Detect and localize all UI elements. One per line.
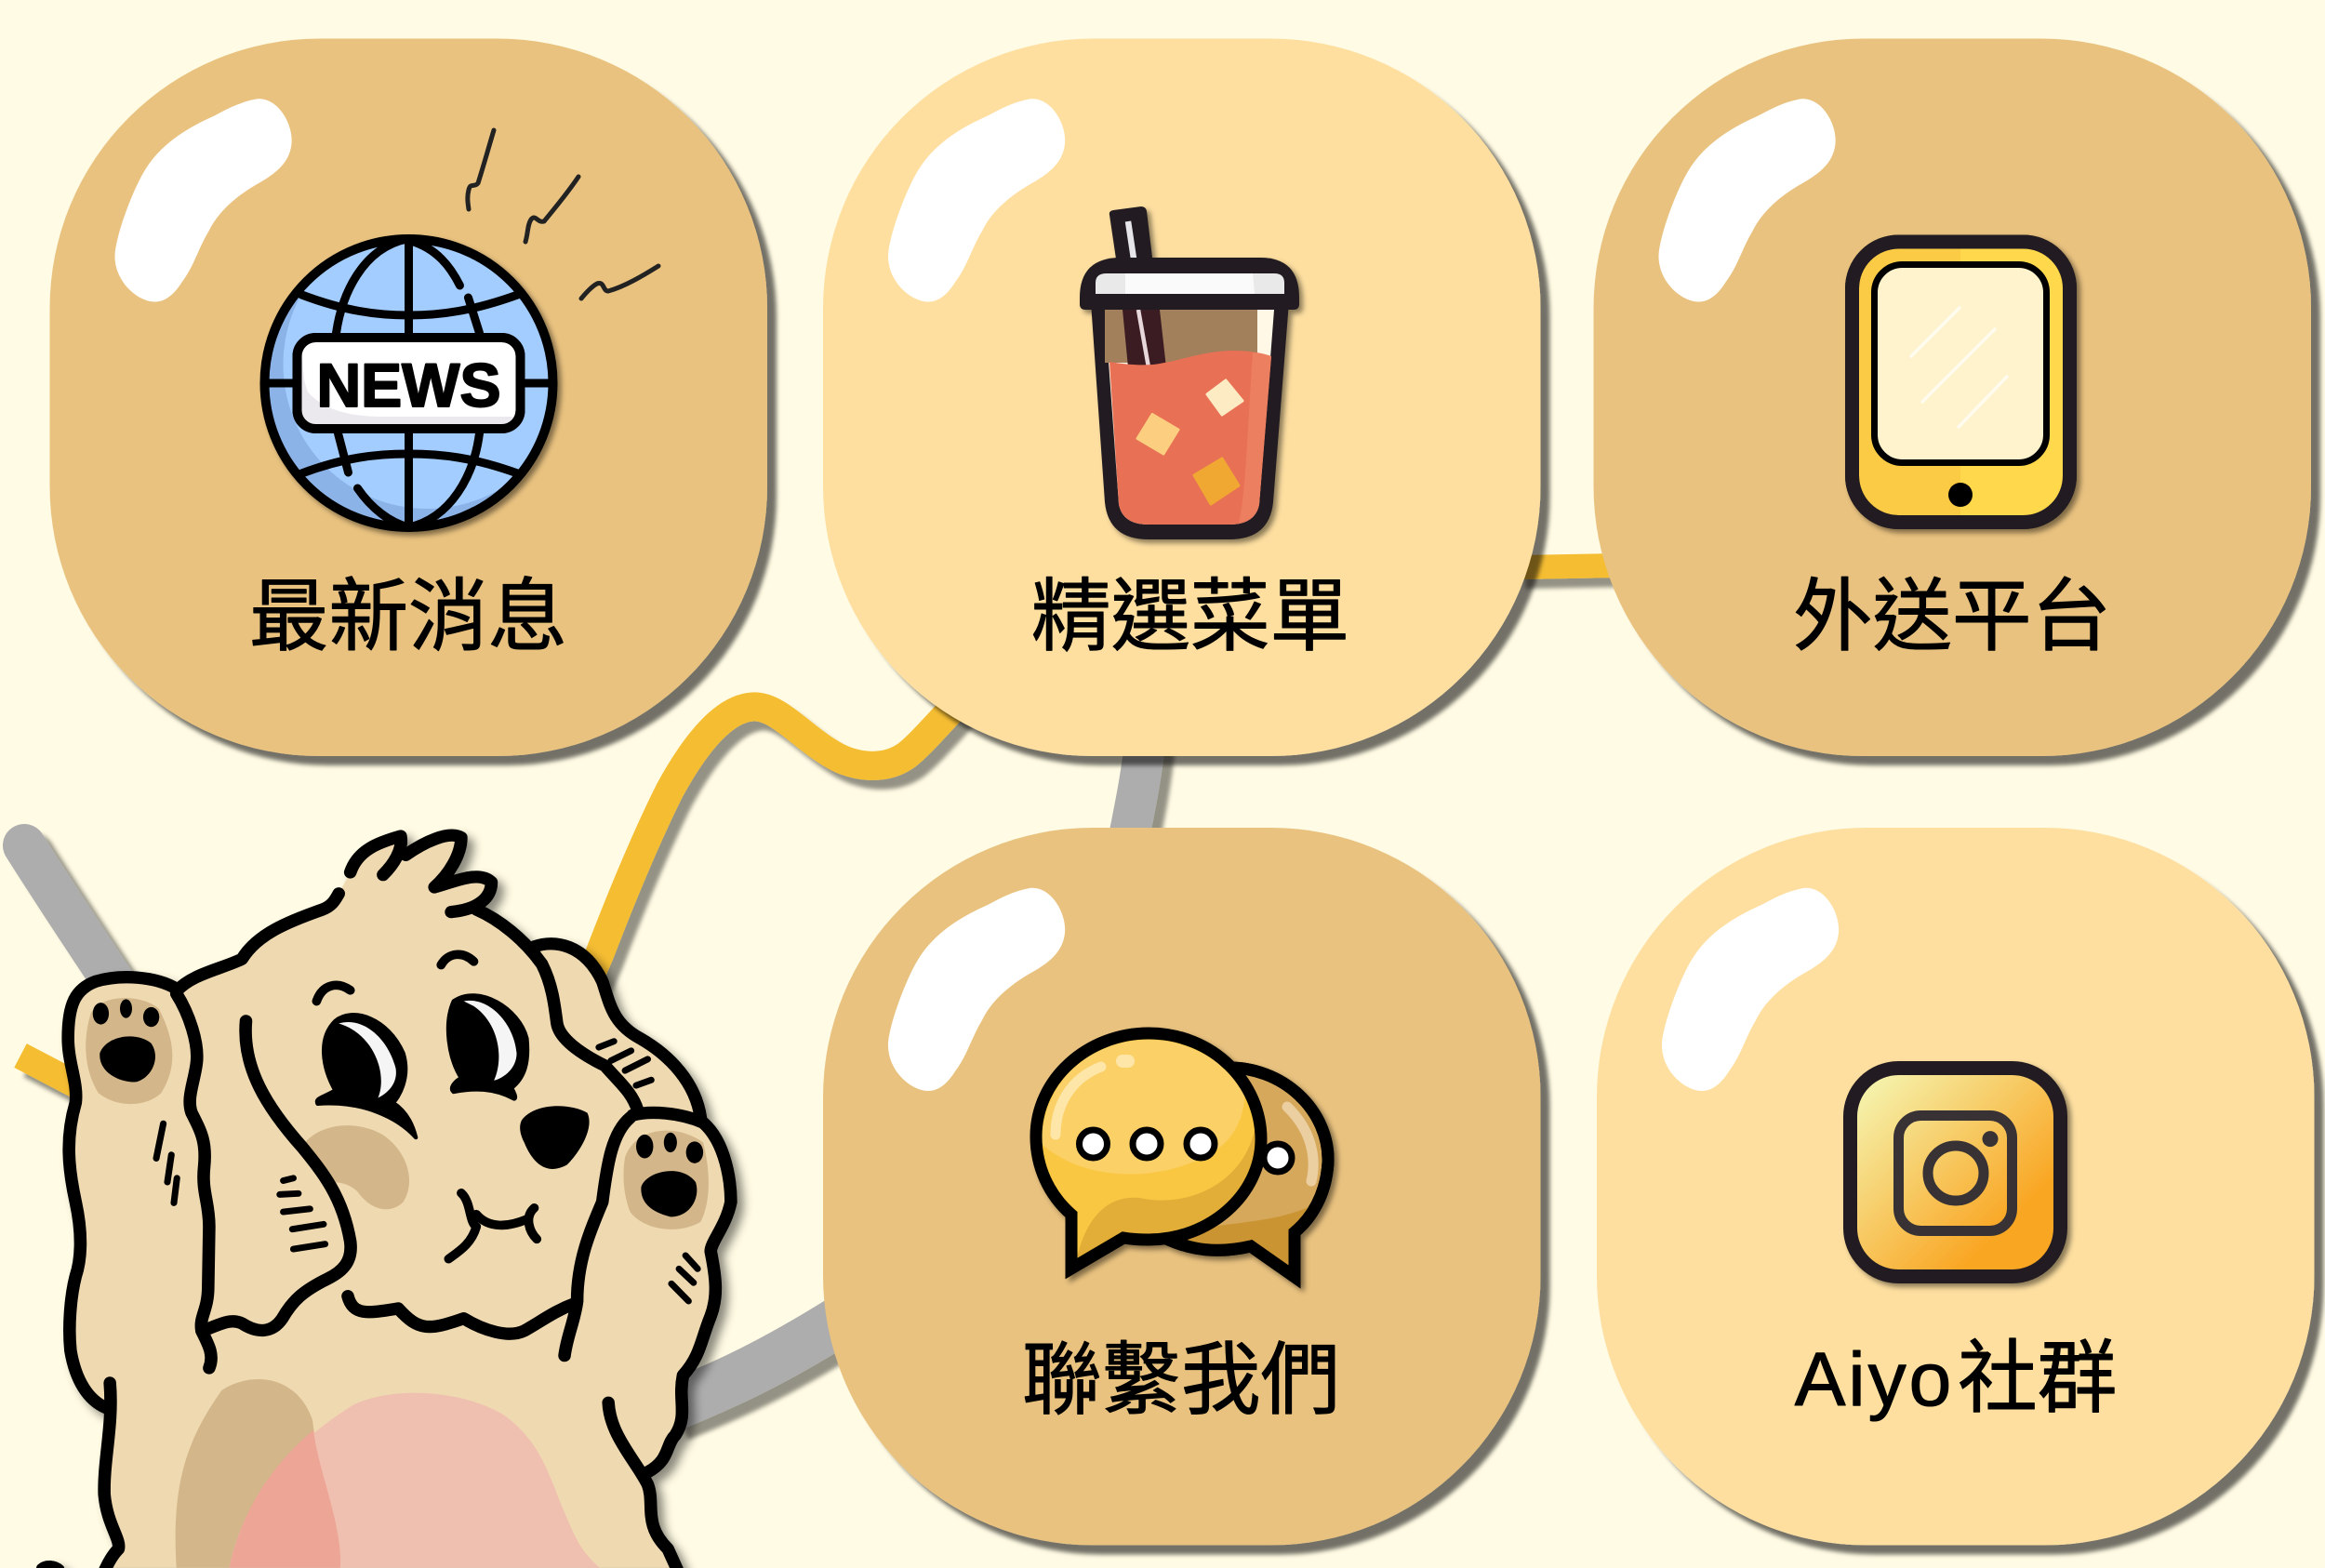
gloss highlight	[115, 99, 292, 302]
cup body	[1091, 302, 1289, 539]
home button	[1948, 483, 1973, 507]
card background	[823, 828, 1540, 1546]
panel: Aiyo社群	[1597, 828, 2314, 1546]
drink liquid	[1109, 351, 1271, 525]
gloss highlight	[888, 99, 1065, 302]
straw top	[1109, 206, 1153, 265]
back bubble	[1162, 1068, 1328, 1277]
panel: 聯繫我們	[823, 828, 1540, 1546]
belly patches	[176, 1379, 600, 1568]
gloss highlight	[1662, 888, 1839, 1091]
label: 外送平台	[1793, 573, 2111, 661]
card background	[823, 39, 1540, 756]
illustration: puppy	[40, 835, 731, 1568]
icon: tablet	[1853, 242, 2070, 523]
cheek patch	[305, 1125, 409, 1209]
icon: chat bubbles	[1036, 1033, 1328, 1277]
camera lens	[1928, 1146, 1984, 1201]
panel: 最新消息	[50, 39, 767, 756]
connector: yellow curve	[586, 693, 967, 986]
icon: news globe	[264, 220, 571, 527]
card background	[1597, 828, 2314, 1546]
camera dot	[1983, 1131, 1998, 1147]
icon: instagram	[1851, 1068, 2061, 1276]
panel: 外送平台	[1594, 39, 2311, 756]
label: 最新消息	[249, 573, 567, 661]
gloss highlight	[888, 888, 1065, 1091]
puppy left eye	[317, 1015, 416, 1137]
connector: yellow left stub	[20, 1056, 79, 1086]
screen glints	[1911, 308, 2007, 427]
connector: yellow right	[1516, 565, 1618, 567]
right paw pad	[623, 1131, 709, 1229]
puppy outlines	[40, 835, 731, 1568]
connector: grey top left	[24, 845, 119, 990]
lid	[1080, 258, 1299, 310]
card background	[1594, 39, 2311, 756]
puppy nose	[520, 1106, 590, 1169]
news banner: NEWS	[316, 351, 500, 419]
label: Aiyo社群	[1795, 1335, 2117, 1423]
connector: grey lower right	[670, 1305, 865, 1407]
puppy right eye	[448, 995, 527, 1099]
ice cubes	[1207, 380, 1242, 415]
connector: grey centre	[1129, 735, 1146, 837]
connector lines	[20, 565, 1618, 1407]
icon: iced drink	[1080, 206, 1299, 539]
fur hatch marks	[156, 1042, 698, 1301]
gloss highlight	[1659, 99, 1836, 302]
front bubble	[1036, 1033, 1261, 1269]
icon: sound scribbles	[468, 130, 658, 299]
camera frame	[1899, 1116, 2013, 1231]
label: 聯繫我們	[1022, 1336, 1340, 1425]
card background	[50, 39, 767, 756]
screen	[1875, 264, 2046, 463]
news banner	[298, 338, 521, 429]
puppy body fill	[68, 835, 731, 1568]
label: 精選菜單	[1031, 573, 1349, 661]
panel: 精選菜單	[823, 39, 1540, 756]
left paw pad	[86, 998, 172, 1104]
